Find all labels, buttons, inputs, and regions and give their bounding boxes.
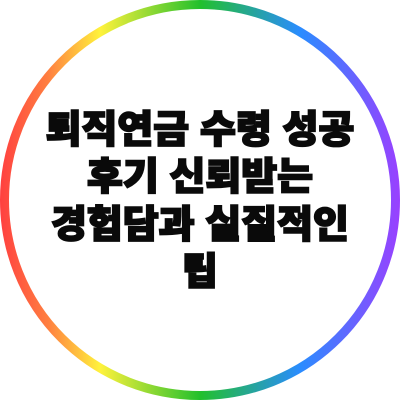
title: 경험담과 실질적인 <box>51 205 349 246</box>
title: 후기 신뢰받는 <box>87 157 313 198</box>
title: 퇴직연금 수령 성공 <box>46 110 354 151</box>
title: 팁 <box>182 252 218 293</box>
